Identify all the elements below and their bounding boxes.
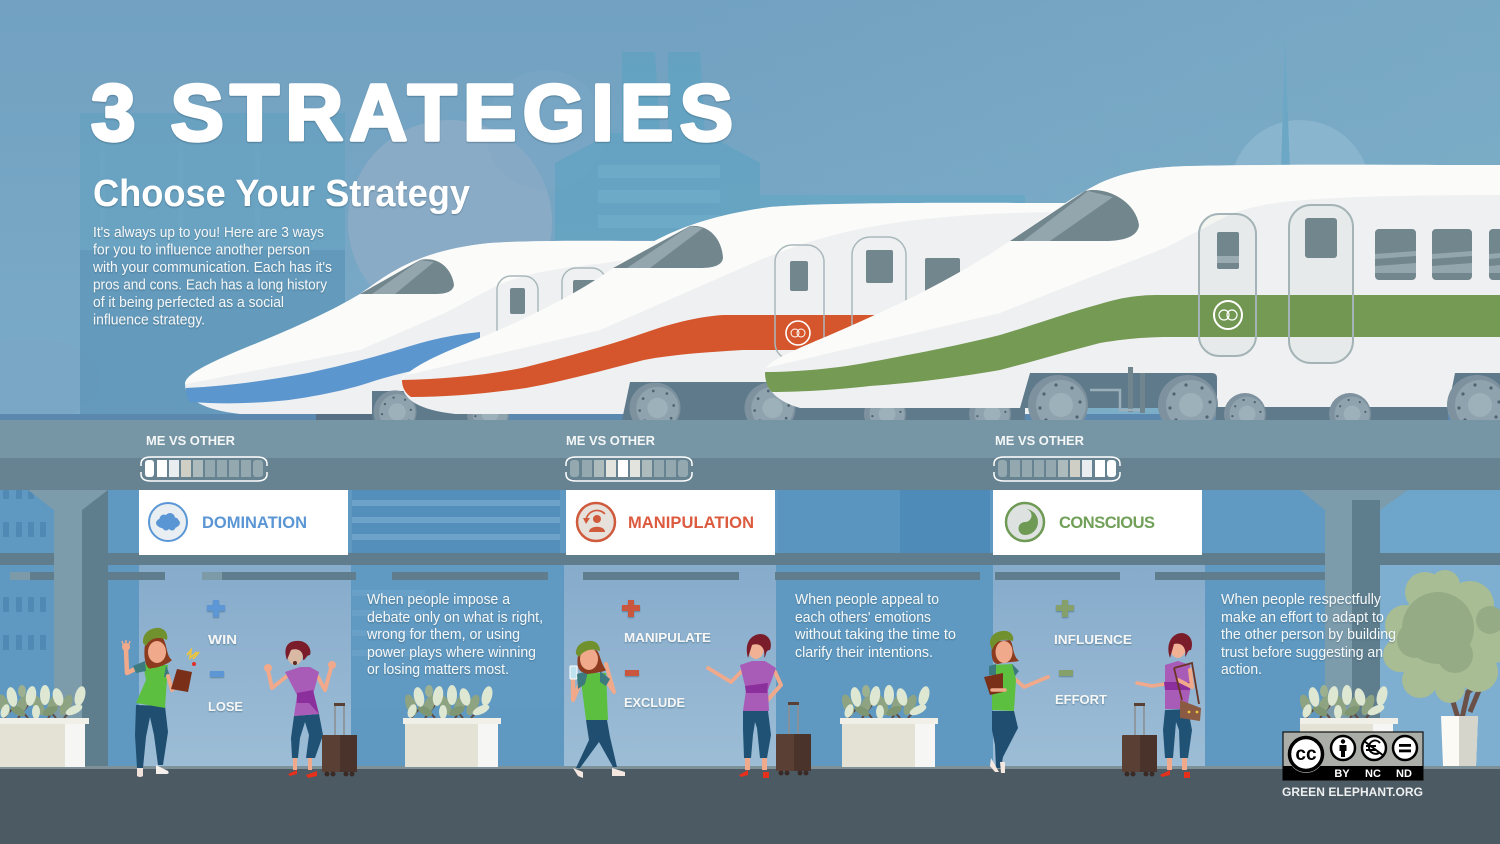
icon: minus xyxy=(1059,670,1073,676)
character: green woman, conscious xyxy=(984,631,1048,773)
intro text: influence strategy. xyxy=(93,312,205,328)
glass panels xyxy=(139,565,1205,768)
ground xyxy=(0,766,1500,844)
character: purple woman, domination xyxy=(264,641,336,778)
description: clarify their intentions. xyxy=(795,645,933,661)
description: the other person by building xyxy=(1221,627,1396,643)
strategy card xyxy=(566,490,775,555)
icon: person with arrow xyxy=(577,503,615,541)
train: red xyxy=(402,203,1075,434)
strategy card xyxy=(139,490,348,555)
icon: cloud xyxy=(149,503,187,541)
strategy name: DOMINATION xyxy=(202,514,307,532)
description: debate only on what is right, xyxy=(367,610,543,626)
license badge: cc xyxy=(1295,744,1317,765)
pillar: left xyxy=(28,490,108,768)
intro text: It's always up to you! Here are 3 ways xyxy=(93,225,324,241)
scale bar xyxy=(994,457,1120,481)
scale bar xyxy=(141,457,267,481)
planter 1 xyxy=(0,685,89,767)
intro text: pros and cons. Each has a long history xyxy=(93,278,328,294)
tree xyxy=(1383,570,1500,766)
suitcase 1 xyxy=(322,703,357,776)
description: When people appeal to xyxy=(795,592,939,608)
description xyxy=(794,592,956,661)
character: green woman, manipulation xyxy=(570,641,625,778)
intro text: with your communication. Each has it's xyxy=(92,260,332,276)
lower city backdrop xyxy=(0,490,1500,770)
description: or losing matters most. xyxy=(367,662,509,678)
viaduct deck xyxy=(0,420,1500,490)
subtitle: Choose Your Strategy xyxy=(93,173,470,215)
license badge xyxy=(1283,732,1423,780)
description: action. xyxy=(1221,662,1262,678)
train: green xyxy=(765,165,1500,435)
icon: plus xyxy=(622,600,640,617)
scale label: ME VS OTHER xyxy=(566,433,656,448)
character: purple woman, manipulation xyxy=(708,634,781,778)
intro text: of it being perfected as a social xyxy=(93,295,284,311)
description: trust before suggesting an xyxy=(1221,645,1383,661)
suitcase 3 xyxy=(1122,703,1157,776)
character: purple woman, conscious xyxy=(1137,633,1201,778)
scale label: ME VS OTHER xyxy=(995,433,1085,448)
strategy card xyxy=(993,490,1202,555)
description: each others' emotions xyxy=(795,610,931,626)
platform beams xyxy=(0,553,1500,580)
icon: plus xyxy=(207,600,225,617)
suitcase 2 xyxy=(776,702,811,776)
train: blue xyxy=(185,241,660,435)
description: wrong for them, or using xyxy=(366,627,520,643)
door: rear xyxy=(1289,205,1353,363)
column 3: conscious xyxy=(993,433,1396,707)
title: 3 STRATEGIES xyxy=(91,68,733,157)
description: When people impose a xyxy=(367,592,511,608)
icon: minus xyxy=(210,671,224,677)
description xyxy=(366,592,543,678)
pro label: MANIPULATE xyxy=(624,630,711,645)
train logo xyxy=(1214,301,1242,329)
site credit: GREEN ELEPHANT.ORG xyxy=(1282,785,1423,799)
pro label: INFLUENCE xyxy=(1054,632,1132,647)
license badge: ND xyxy=(1396,768,1412,780)
description xyxy=(1221,592,1396,678)
license badge: NC xyxy=(1365,768,1381,780)
con label: EXCLUDE xyxy=(624,695,685,710)
strategy name: CONSCIOUS xyxy=(1059,514,1155,532)
icon: minus xyxy=(625,670,639,676)
planter 4 xyxy=(1298,685,1398,767)
planter 2 xyxy=(403,685,501,767)
con label: LOSE xyxy=(208,699,243,714)
scale label: ME VS OTHER xyxy=(146,433,236,448)
strategy name: MANIPULATION xyxy=(628,514,754,532)
intro text: for you to influence another person xyxy=(93,242,310,258)
character: green woman, domination xyxy=(122,628,199,777)
column 1: domination xyxy=(139,433,543,714)
skyline xyxy=(0,40,1500,423)
scale bar xyxy=(566,457,692,481)
description: without taking the time to xyxy=(794,627,956,643)
column 2: manipulation xyxy=(566,433,956,710)
icon: plus xyxy=(1056,600,1074,617)
license badge: BY xyxy=(1334,768,1350,780)
pro label: WIN xyxy=(208,632,237,647)
description: power plays where winning xyxy=(367,645,536,661)
planter 3 xyxy=(840,685,938,767)
description: make an effort to adapt to xyxy=(1221,610,1384,626)
intro text xyxy=(92,225,332,328)
door: front xyxy=(1199,214,1256,356)
pillar: right xyxy=(1300,490,1408,768)
con label: EFFORT xyxy=(1055,692,1107,707)
icon: yin yang xyxy=(1006,503,1044,541)
description: When people respectfully xyxy=(1221,592,1382,608)
